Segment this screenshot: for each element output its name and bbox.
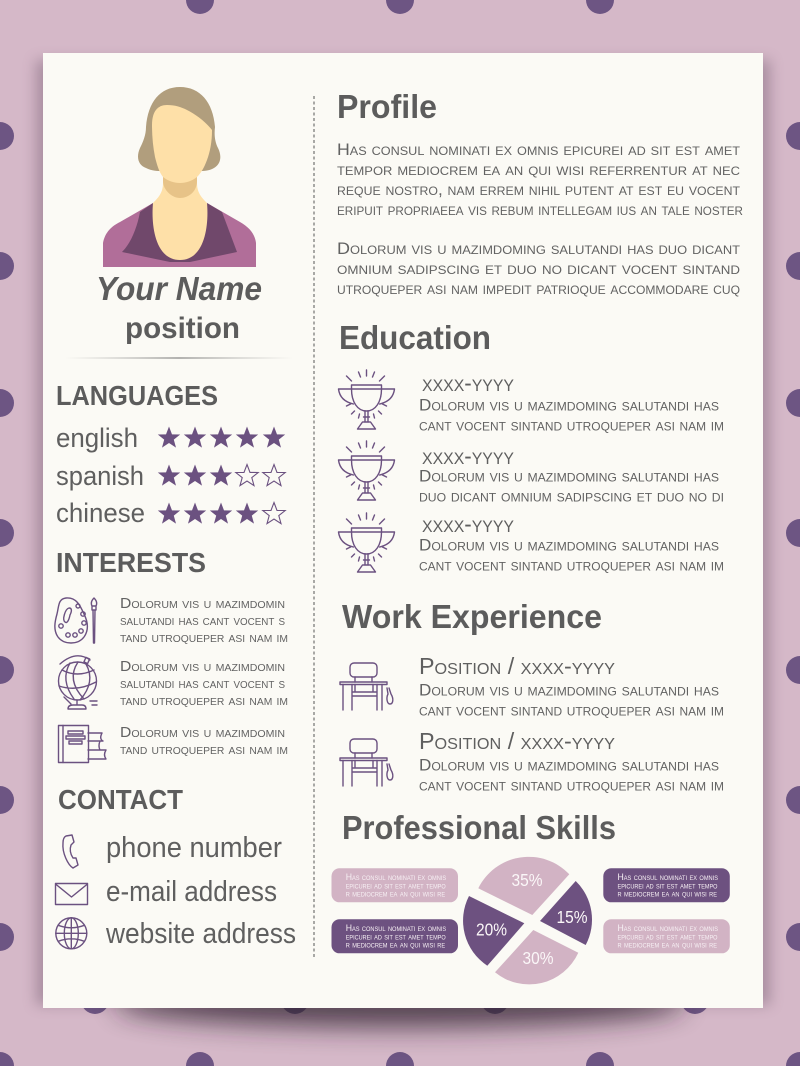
profile paragraph 2: omnium sadipscing et duo no dicant vocent sintand bbox=[337, 259, 740, 278]
interest text 1: Dolorum vis u mazimdomin bbox=[120, 596, 285, 612]
slice 30%: 30% bbox=[522, 948, 554, 968]
neck shadow bbox=[163, 172, 197, 198]
interest text 2 bbox=[120, 659, 288, 709]
education item 2 bbox=[338, 441, 724, 506]
work item 1: Dolorum vis u mazimdoming salutandi has bbox=[419, 680, 719, 700]
education item 3: Dolorum vis u mazimdoming salutandi has bbox=[419, 536, 719, 554]
work item 2 bbox=[340, 728, 724, 794]
shoulders bbox=[103, 203, 256, 267]
education item 3: cant vocent sintand utroqueper asi nam im bbox=[419, 556, 724, 574]
skill callout: bottom right: r mediocrem ea an qui wisi re bbox=[618, 940, 717, 950]
profile paragraph 1: Has consul nominati ex omnis epicurei ad sit est amet bbox=[337, 140, 741, 159]
work item 1: Position / xxxx-yyyy bbox=[419, 653, 615, 679]
interest text 2: salutandi has cant vocent s bbox=[120, 676, 285, 692]
skill callout: top left: epicurei ad sit est amet tempo bbox=[346, 880, 446, 890]
hair bbox=[138, 87, 220, 171]
skill callout: bottom left bbox=[332, 919, 458, 953]
language: english: english bbox=[56, 423, 138, 453]
work item 2: cant vocent sintand utroqueper asi nam im bbox=[419, 776, 724, 794]
contact heading: CONTACT bbox=[58, 784, 183, 815]
face bbox=[152, 105, 212, 183]
icon: phone bbox=[63, 835, 78, 868]
interest text 1: salutandi has cant vocent s bbox=[120, 613, 285, 629]
interest text 3: tand utroqueper asi nam im bbox=[120, 742, 288, 758]
profile paragraph 2 bbox=[337, 239, 741, 298]
skill callout: bottom right: Has consul nominati ex omnis bbox=[618, 923, 718, 933]
language: english bbox=[56, 423, 285, 453]
interest text 1 bbox=[120, 596, 288, 646]
profile paragraph 2: utroqueper asi nam impedit patrioque accommodare cuq bbox=[337, 279, 740, 298]
language: chinese bbox=[56, 498, 285, 528]
work item 2: Position / xxxx-yyyy bbox=[419, 728, 615, 754]
icon: books bbox=[58, 726, 106, 762]
professional skills heading: Professional Skills bbox=[342, 809, 616, 846]
skill callout: top right bbox=[603, 868, 730, 902]
phone number: phone number bbox=[106, 832, 282, 864]
e-mail address: e-mail address bbox=[106, 876, 277, 908]
profile paragraph 1: reque nostro, nam errem nihil putent at est eu vocent bbox=[337, 180, 741, 199]
skill callout: top left: r mediocrem ea an qui wisi re bbox=[346, 889, 445, 899]
skill callout: top left: Has consul nominati ex omnis bbox=[346, 872, 446, 882]
slice 35%: 35% bbox=[512, 870, 542, 890]
icon: web globe bbox=[56, 918, 87, 949]
education item 1: Dolorum vis u mazimdoming salutandi has bbox=[419, 396, 719, 414]
education item 1: xxxx-yyyy bbox=[422, 370, 514, 397]
skill callout: top right: Has consul nominati ex omnis bbox=[618, 872, 718, 882]
work item 2: Dolorum vis u mazimdoming salutandi has bbox=[419, 756, 719, 774]
profile paragraph 1 bbox=[337, 140, 743, 219]
position: position bbox=[125, 312, 240, 345]
education item 2: xxxx-yyyy bbox=[422, 443, 514, 470]
interest text 2: tand utroqueper asi nam im bbox=[120, 693, 288, 709]
education item 3: xxxx-yyyy bbox=[422, 511, 514, 538]
skill callout: bottom right bbox=[603, 919, 730, 953]
collar bbox=[122, 203, 237, 262]
language: chinese: chinese bbox=[56, 498, 145, 528]
languages heading: LANGUAGES bbox=[56, 380, 218, 411]
work item 1 bbox=[340, 653, 724, 720]
profile paragraph 2: Dolorum vis u mazimdoming salutandi has duo dicant bbox=[337, 239, 741, 258]
profile paragraph 1: tempor mediocrem ea an qui wisi referrentur at nec bbox=[337, 160, 740, 179]
column divider bbox=[313, 96, 315, 958]
interest text 2: Dolorum vis u mazimdomin bbox=[120, 659, 285, 675]
skill callout: top left bbox=[332, 868, 458, 902]
name: Your Name bbox=[96, 270, 262, 307]
slice 15%: 15% bbox=[556, 907, 588, 927]
skill callout: bottom left: r mediocrem ea an qui wisi re bbox=[346, 940, 445, 950]
language: spanish: spanish bbox=[56, 461, 144, 491]
icon: palette and brush bbox=[55, 598, 97, 643]
interest text 3: Dolorum vis u mazimdomin bbox=[120, 725, 285, 741]
education item 3 bbox=[338, 511, 724, 574]
interest text 3 bbox=[120, 725, 288, 758]
education item 2: duo dicant omnium sadipscing et duo no di bbox=[419, 486, 724, 506]
profile paragraph 1: eripuit propriaeea vis rebum intellegam ius an tale noster bbox=[337, 200, 743, 219]
education item 1: cant vocent sintand utroqueper asi nam im bbox=[419, 416, 724, 434]
website address: website address bbox=[105, 918, 296, 950]
work experience heading: Work Experience bbox=[342, 598, 602, 635]
language: spanish bbox=[56, 461, 285, 491]
skill callout: bottom right: epicurei ad sit est amet tempo bbox=[618, 931, 718, 941]
education heading: Education bbox=[339, 319, 491, 356]
skill callout: top right: r mediocrem ea an qui wisi re bbox=[618, 889, 717, 899]
interests heading: INTERESTS bbox=[56, 547, 206, 578]
profile heading: Profile bbox=[337, 88, 437, 125]
icon: desk globe bbox=[58, 656, 97, 709]
slice 20%: 20% bbox=[476, 920, 507, 940]
education item 2: Dolorum vis u mazimdoming salutandi has bbox=[419, 466, 719, 486]
education item 1 bbox=[338, 370, 724, 434]
skill callout: bottom left: Has consul nominati ex omnis bbox=[346, 923, 446, 933]
skill callout: top right: epicurei ad sit est amet tempo bbox=[618, 880, 718, 890]
work item 1: cant vocent sintand utroqueper asi nam im bbox=[419, 700, 724, 720]
icon: envelope bbox=[56, 884, 88, 904]
neck bbox=[153, 165, 207, 260]
portrait bbox=[103, 87, 256, 267]
interest text 1: tand utroqueper asi nam im bbox=[120, 630, 288, 646]
pie chart bbox=[463, 857, 592, 984]
skill callout: bottom left: epicurei ad sit est amet tempo bbox=[346, 931, 446, 941]
